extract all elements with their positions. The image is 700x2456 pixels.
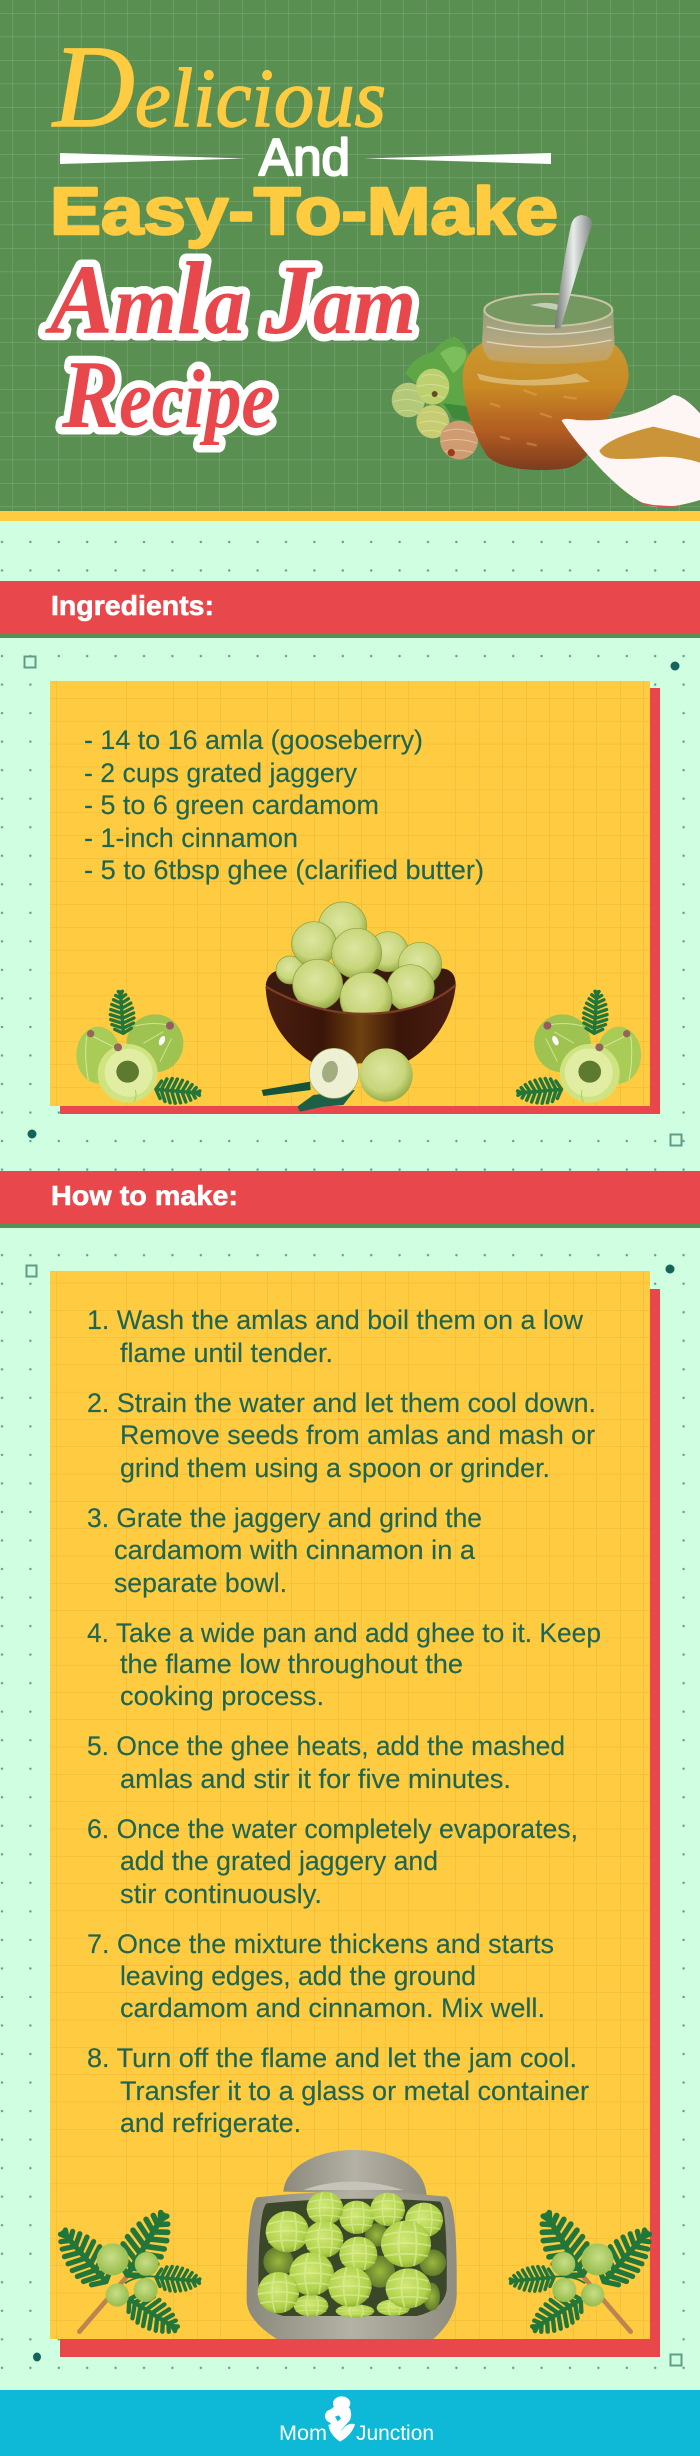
step 5: 5. Once the ghee heats, add the mashed bbox=[87, 1731, 565, 1761]
step 7: cardamom and cinnamon. Mix well. bbox=[120, 1993, 545, 2023]
title: And with rules bbox=[60, 129, 551, 187]
step 7: leaving edges, add the ground bbox=[120, 1961, 476, 1991]
step 5 bbox=[87, 1731, 565, 1794]
jar neck and glass rim bbox=[482, 294, 615, 364]
section band: Ingredients: Ingredients: bbox=[51, 590, 214, 621]
title: Delicious: Delicious bbox=[51, 21, 386, 152]
title: Easy-To-Make: Easy-To-Make bbox=[50, 174, 558, 249]
illustration: metal bowl of gooseberries bbox=[247, 2150, 457, 2339]
gooseberries beside jar bbox=[392, 337, 478, 459]
jar body with jam bbox=[463, 342, 629, 470]
illustration: gooseberry branch left bbox=[49, 2204, 201, 2342]
ingredients list: - 2 cups grated jaggery bbox=[84, 758, 357, 788]
step 5: amlas and stir it for five minutes. bbox=[120, 1764, 511, 1794]
step 6: add the grated jaggery and bbox=[120, 1846, 438, 1876]
step 2: 2. Strain the water and let them cool down. bbox=[87, 1388, 596, 1418]
step 7: 7. Once the mixture thickens and starts bbox=[87, 1929, 554, 1959]
panel: ingredients card bbox=[50, 681, 660, 1114]
step 4: the flame low throughout the bbox=[120, 1649, 463, 1679]
illustration: gooseberry branch right bbox=[509, 2204, 661, 2342]
illustration: jam jar, gooseberries and dish bbox=[392, 215, 700, 508]
ingredients list: - 1-inch cinnamon bbox=[84, 823, 298, 853]
illustration: amla fruit left bbox=[76, 991, 201, 1105]
illustration: bowl of amla bbox=[262, 902, 456, 1112]
illustration: amla fruit right bbox=[517, 991, 641, 1105]
step 8: and refrigerate. bbox=[120, 2108, 301, 2138]
panel: method card bbox=[49, 1271, 661, 2357]
step 1: 1. Wash the amlas and boil them on a low bbox=[87, 1305, 584, 1335]
ingredients list: - 5 to 6tbsp ghee (clarified butter) bbox=[84, 855, 484, 885]
dotted background pattern bbox=[0, 521, 700, 2390]
step 8: Transfer it to a glass or metal container bbox=[120, 2076, 589, 2106]
step 3: separate bowl. bbox=[114, 1568, 287, 1598]
step 6 bbox=[87, 1814, 578, 1909]
step 2: Remove seeds from amlas and mash or bbox=[120, 1420, 595, 1450]
step 4: cooking process. bbox=[120, 1681, 324, 1711]
title: And with rules: And bbox=[259, 129, 350, 187]
section band: How to make bbox=[0, 1171, 700, 1228]
logo: MomJunction: Junction bbox=[356, 2422, 434, 2445]
ingredients list: - 5 to 6 green cardamom bbox=[84, 790, 379, 820]
white dish with jam bbox=[562, 395, 700, 508]
step 7 bbox=[87, 1929, 554, 2023]
step 4 bbox=[87, 1618, 601, 1711]
logo: MomJunction bbox=[279, 2396, 434, 2445]
spoon bbox=[555, 215, 592, 328]
step 1 bbox=[87, 1305, 584, 1368]
logo: MomJunction: Mom bbox=[279, 2422, 327, 2445]
footer bbox=[0, 2390, 700, 2456]
decorative marker squares and dots: method bbox=[26, 1264, 682, 2366]
step 4: 4. Take a wide pan and add ghee to it. Keep bbox=[87, 1618, 601, 1648]
step 3: 3. Grate the jaggery and grind the bbox=[87, 1503, 482, 1533]
step 2: grind them using a spoon or grinder. bbox=[120, 1453, 550, 1483]
step 8: 8. Turn off the flame and let the jam cool. bbox=[87, 2043, 577, 2073]
title: Amla Jam: Amla Jam bbox=[44, 241, 416, 356]
ingredients list: - 14 to 16 amla (gooseberry) bbox=[84, 725, 423, 755]
header panel bbox=[0, 0, 700, 521]
step 6: 6. Once the water completely evaporates, bbox=[87, 1814, 578, 1844]
ingredients list bbox=[84, 725, 484, 885]
title: Recipe: Recipe bbox=[61, 341, 274, 449]
section band: Ingredients bbox=[0, 581, 700, 638]
step 2 bbox=[87, 1388, 596, 1483]
step 8 bbox=[87, 2043, 589, 2138]
step 3: cardamom with cinnamon in a bbox=[114, 1535, 475, 1565]
step 3 bbox=[87, 1503, 482, 1598]
section band: How to make: How to make: bbox=[51, 1180, 238, 1211]
step 6: stir continuously. bbox=[120, 1879, 322, 1909]
decorative marker squares and dots: ingredients bbox=[24, 656, 682, 1146]
step 1: flame until tender. bbox=[120, 1338, 333, 1368]
